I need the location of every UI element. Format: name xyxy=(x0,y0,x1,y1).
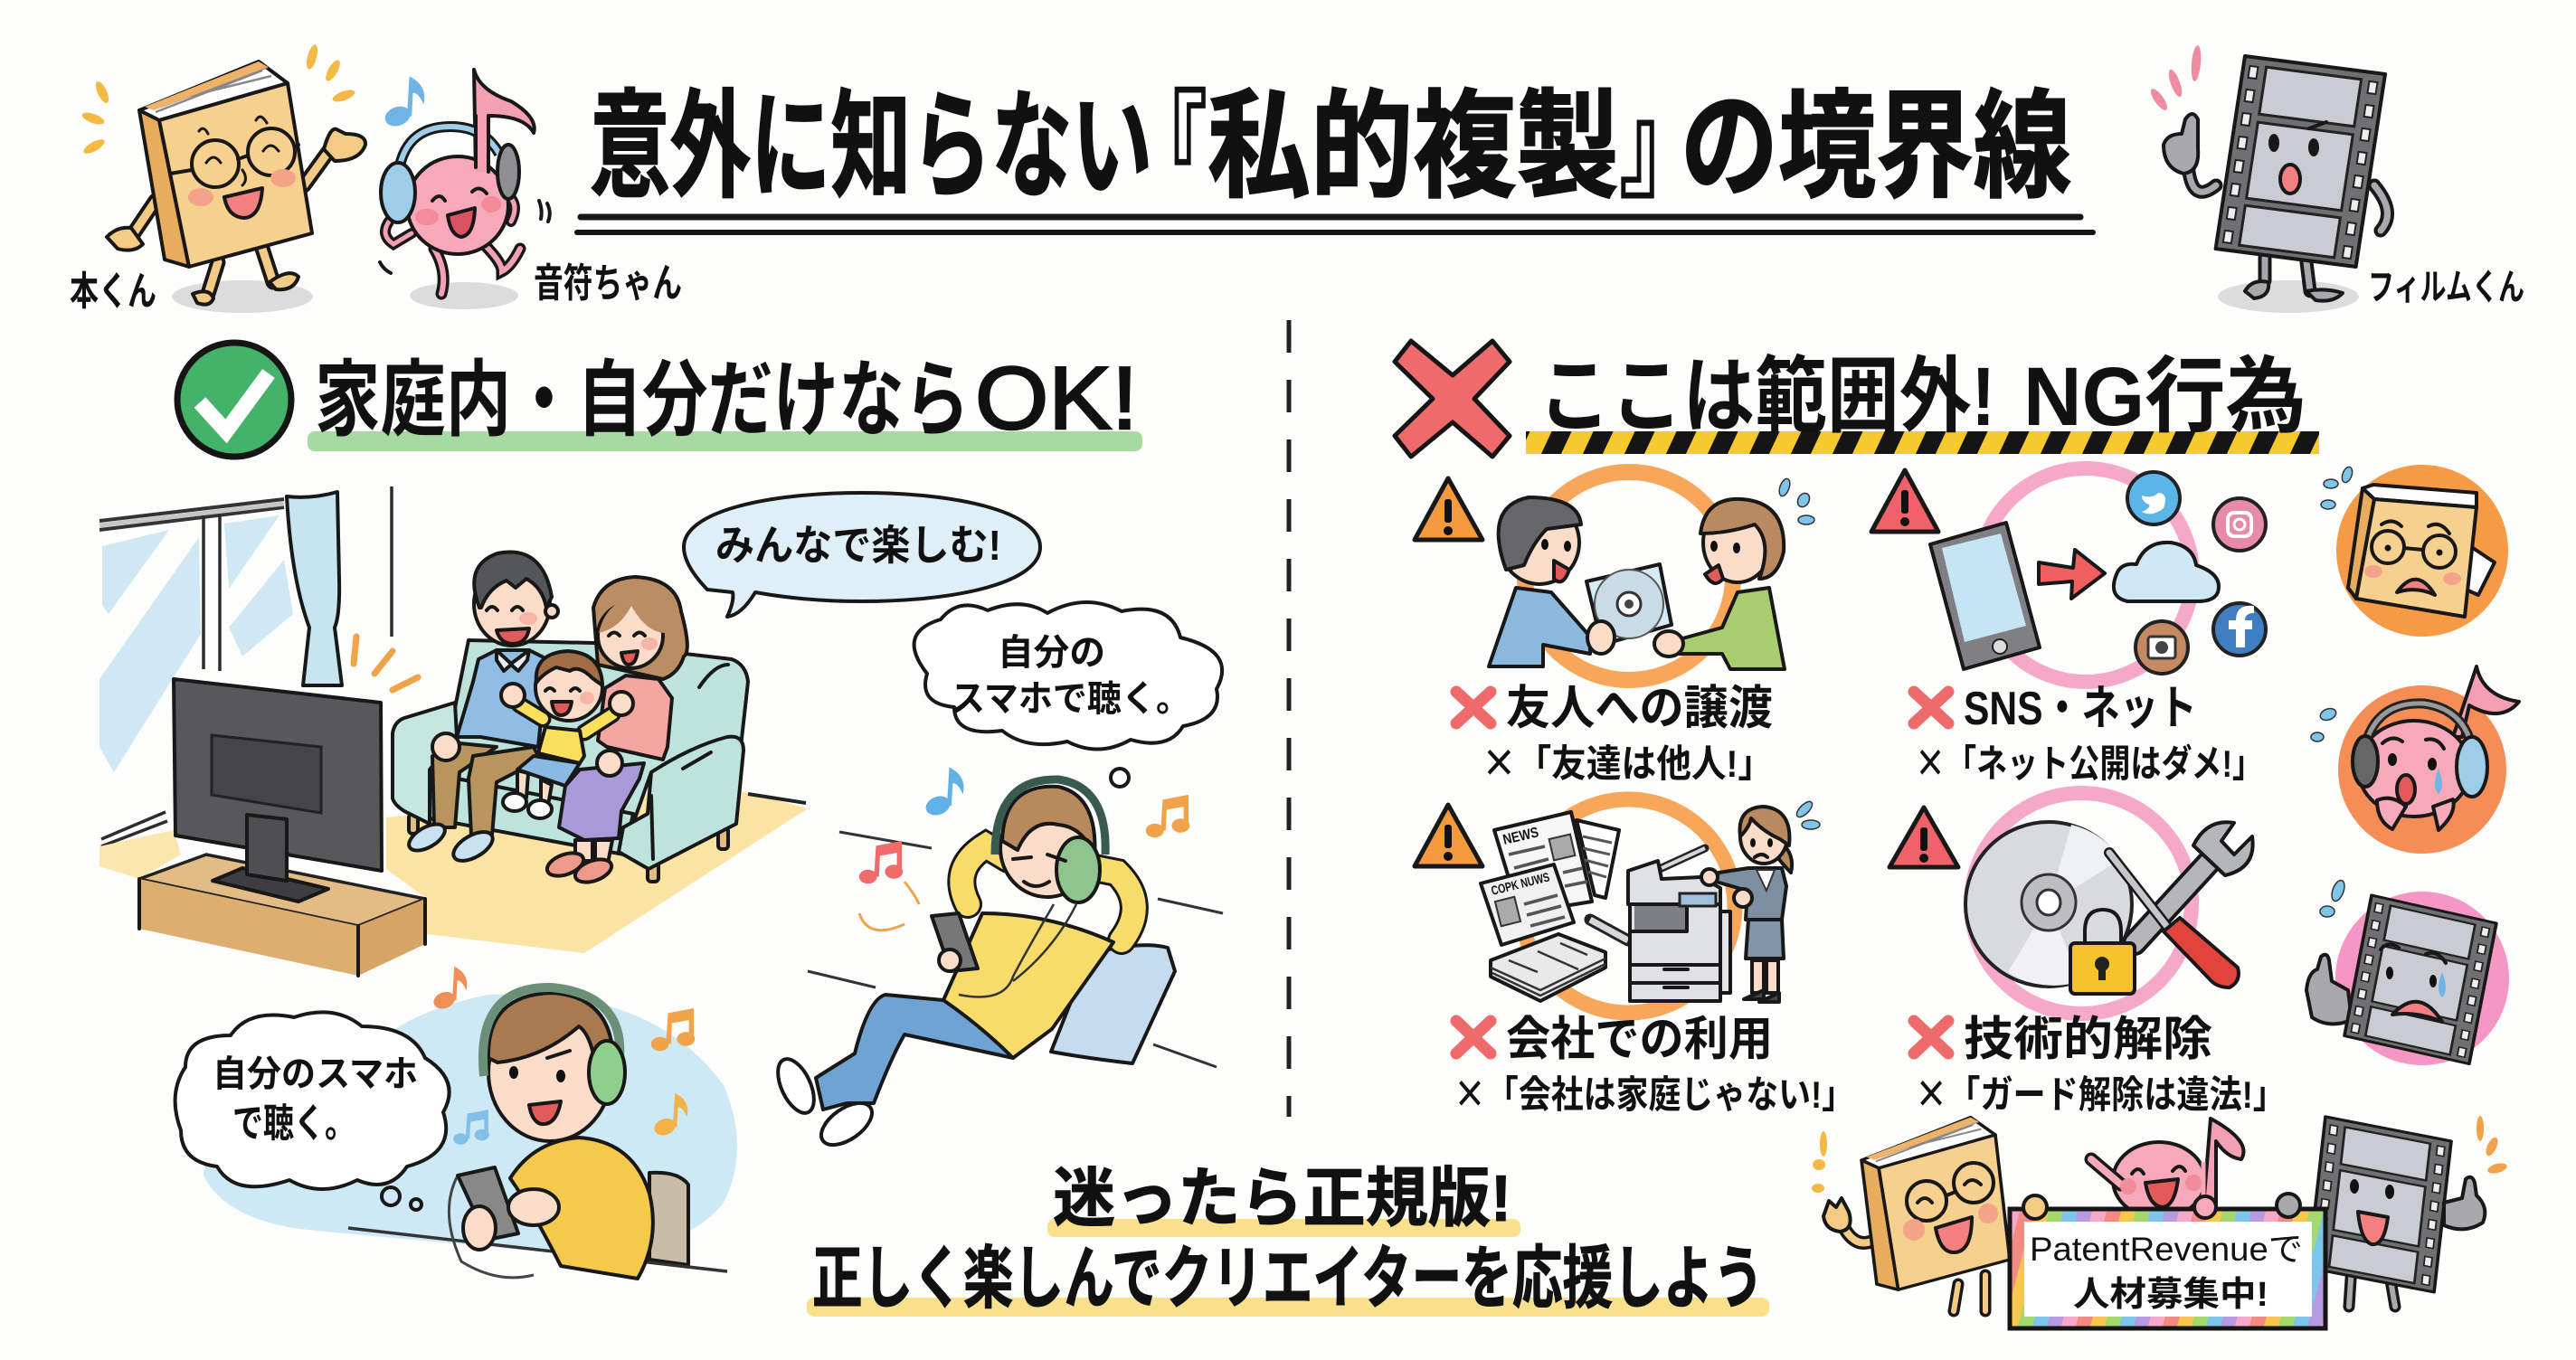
character: 本くん xyxy=(80,43,365,313)
mom xyxy=(545,577,687,887)
bottom message xyxy=(807,1163,1769,1318)
bottom message: 迷ったら正規版! xyxy=(1053,1163,1511,1235)
recruiting sign xyxy=(2010,1194,2325,1328)
speech bubble: みんなで楽しむ: みんなで楽しむ! xyxy=(715,522,1001,569)
item: 友人への譲渡: 友人への譲渡 xyxy=(1506,683,1773,735)
OK heading: OK! xyxy=(975,348,1138,448)
scene: person relaxing with headphones xyxy=(771,767,1223,1153)
thought bubble: 自分のスマホで聴く (reclining): 自分の xyxy=(998,633,1105,673)
worried character: book xyxy=(2321,465,2508,637)
label: 本くん: 本くん xyxy=(70,269,156,314)
item: 技術的解除 xyxy=(1889,793,2286,1119)
item: 友人への譲渡: ×「友達は他人!」 xyxy=(1482,733,1773,789)
item: 会社での利用 xyxy=(1415,799,1854,1119)
item: SNS・ネット xyxy=(1871,468,2266,789)
speech bubble: みんなで楽しむ xyxy=(684,493,1040,617)
recruiting sign: 人材募集中! xyxy=(2073,1276,2268,1314)
item: 会社での利用: ×「会社は家庭じゃない!」 xyxy=(1454,1064,1854,1119)
title xyxy=(577,80,2093,232)
label: 音符ちゃん: 音符ちゃん xyxy=(534,261,682,306)
title: 私的複製 xyxy=(1208,80,1619,212)
NG heading: NG行為 xyxy=(2023,351,2306,443)
scene: person with smartphone and headphones xyxy=(204,967,737,1279)
thought bubble: 自分のスマホで聴く (seated): で聴く。 xyxy=(232,1101,355,1146)
worried character: film xyxy=(2306,879,2509,1065)
icon: red X xyxy=(1395,341,1510,457)
title: の境界線 xyxy=(1681,80,2071,212)
item: 友人への譲渡 xyxy=(1415,472,1814,789)
panel: NG section xyxy=(1395,341,2519,1119)
title: 』 xyxy=(1619,80,1706,212)
thought bubble: 自分のスマホで聴く (reclining) xyxy=(914,602,1222,787)
OK heading: 家庭内・自分だけなら xyxy=(315,354,970,447)
panel: OK section xyxy=(99,343,1223,1279)
title: 『 xyxy=(1126,80,1208,212)
character: フィルムくん xyxy=(2148,45,2388,313)
divider: dashed center line xyxy=(1286,320,1292,1117)
icon: check mark xyxy=(177,343,291,457)
child xyxy=(501,651,633,818)
recruiting sign: PatentRevenueで xyxy=(2030,1231,2303,1268)
character: 音符ちゃん xyxy=(380,70,550,309)
thought bubble: 自分のスマホで聴く (seated): 自分のスマホ xyxy=(213,1054,418,1094)
thought bubble: 自分のスマホで聴く (reclining): スマホで聴く。 xyxy=(951,679,1190,719)
thought bubble: 自分のスマホで聴く (seated) xyxy=(175,1012,450,1210)
item: 会社での利用: 会社での利用 xyxy=(1506,1014,1773,1066)
NG heading xyxy=(1526,351,2319,454)
item: 技術的解除: ×「ガード解除は違法!」 xyxy=(1915,1064,2286,1119)
item: 技術的解除: 技術的解除 xyxy=(1964,1014,2212,1066)
worried character: note xyxy=(2311,666,2519,854)
item: SNS・ネット: ×「ネット公開はダメ!」 xyxy=(1915,733,2263,789)
item: 会社での利用: NEWS xyxy=(1501,825,1540,848)
NG heading: ここは範囲外! xyxy=(1539,351,1995,443)
scene: family watching TV xyxy=(99,486,808,976)
item: SNS・ネット: SNS・ネット xyxy=(1964,683,2197,735)
dad xyxy=(404,552,558,866)
characters with recruiting sign xyxy=(1812,1116,2508,1328)
item: 会社での利用: COPK NUWS xyxy=(1490,869,1551,898)
bottom message: 正しく楽しんでクリエイターを応援しよう xyxy=(812,1241,1764,1318)
title: 意外に知らない xyxy=(590,80,1152,212)
